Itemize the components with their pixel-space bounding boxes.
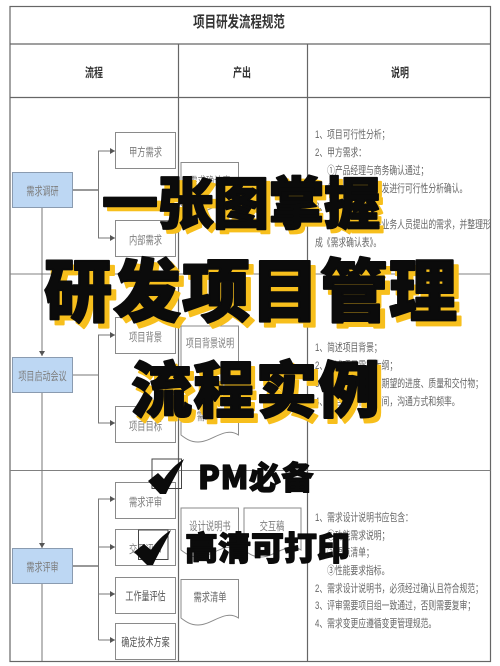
checkbox: 高清可打印 [134, 530, 171, 565]
document: 交互稿 [244, 508, 301, 557]
document: 设计说明书 [181, 508, 238, 557]
box: 项目背景 [116, 318, 176, 354]
notes: row 2 [315, 341, 483, 408]
notes: row 3: 1、需求设计说明书应包含： [315, 511, 413, 524]
checkbox: PM必备 [148, 459, 184, 494]
notes: row 3: ③性能要求指标。 [327, 564, 389, 577]
box: 甲方需求: 甲方需求 [129, 145, 162, 159]
label: PM必备: PM必备 [198, 453, 314, 499]
box: 交互评审: 交互评审 [129, 542, 162, 556]
notes: row 1: 2、甲方需求： [315, 146, 366, 159]
box: 工作量评估 [116, 578, 176, 614]
column headers: 产出 [233, 64, 251, 80]
box: 需求评审 [116, 482, 176, 518]
column headers: 说明 [391, 64, 409, 80]
notes: row 1: ②产品经理与研发进行可行性分析确认。 [327, 182, 467, 195]
document: 设计说明书: 设计说明书 [189, 519, 231, 533]
notes: row 2: 2、简述项目需求大纲； [315, 359, 397, 372]
document: 需求确认表: 需求确认表 [189, 174, 231, 188]
notes: row 1: 3、内部需求： [315, 200, 366, 213]
box: 项目目标 [116, 406, 176, 442]
notes: row 3: 4、需求变更应遵循变更管理规范。 [315, 617, 436, 630]
notes: row 1: 成《需求确认表》。 [315, 236, 381, 249]
box: 需求评审: 需求评审 [129, 495, 162, 509]
document: 项目背景说明 [181, 326, 238, 442]
flow step: 项目启动会议 [12, 358, 72, 392]
table title: 项目研发流程规范 [193, 12, 285, 30]
headline: 研发项目管理: 研发项目管理 [44, 237, 458, 336]
flow step: 需求调研: 需求调研 [26, 185, 59, 198]
flow step: 需求调研 [12, 172, 72, 208]
box: 内部需求 [116, 220, 176, 256]
column headers [85, 64, 409, 80]
column headers: 流程 [85, 64, 103, 80]
document: 项目背景说明: 需求 [197, 410, 213, 423]
document: 需求清单 [181, 580, 238, 625]
box: 交互评审 [116, 530, 176, 566]
document: 项目背景说明: 项目背景说明 [186, 335, 234, 350]
box: 甲方需求 [116, 132, 176, 168]
notes: row 3: 3、评审需要项目组一致通过，否则需要复审； [315, 599, 475, 612]
notes: row 1 [315, 128, 491, 249]
box: 内部需求: 内部需求 [129, 233, 162, 247]
box: 工作量评估: 工作量评估 [125, 588, 166, 603]
notes: row 3: ①功能需求说明； [327, 529, 389, 542]
flow step: 需求评审 [12, 548, 72, 584]
box: 确定技术方案: 确定技术方案 [121, 634, 170, 649]
headline: 流程实例: 流程实例 [135, 346, 385, 435]
box: 项目目标: 项目目标 [129, 420, 162, 433]
flow step: 项目启动会议: 项目启动会议 [18, 368, 67, 383]
box: 确定技术方案 [116, 624, 176, 660]
notes: row 2: 1、简述项目背景； [315, 341, 382, 354]
headline: 研发项目管理: 研发项目管理 [49, 242, 463, 341]
label: 高清可打印: 高清可打印 [185, 522, 350, 570]
flow step: 需求评审: 需求评审 [26, 559, 59, 574]
headline: 流程实例: 流程实例 [131, 341, 381, 430]
notes: row 2: 3、明确项目目标，期望的进度、质量和交付物； [315, 377, 483, 390]
notes: row 3: ②要点清单； [327, 546, 374, 559]
headline: 一张图掌握: 一张图掌握 [106, 164, 384, 245]
notes: row 3 [315, 511, 483, 630]
box: 项目背景: 项目背景 [129, 330, 162, 344]
headline: 一张图掌握: 一张图掌握 [102, 160, 380, 241]
notes: row 3: 2、需求设计说明书，必须经过确认且符合规范； [315, 582, 483, 595]
notes: row 1: ①产品经理收集业务人员提出的需求，并整理形 [327, 218, 491, 231]
document: 交互稿: 交互稿 [260, 519, 284, 533]
notes: row 1: ①产品经理与商务确认通过； [327, 164, 428, 177]
document: 需求确认表 [181, 162, 238, 212]
document: 需求清单: 需求清单 [193, 590, 227, 604]
notes: row 2: 4、项目文档存储空间，沟通方式和频率。 [315, 395, 460, 408]
flow connectors [42, 151, 115, 661]
notes: row 1: 1、项目可行性分析； [315, 128, 389, 141]
